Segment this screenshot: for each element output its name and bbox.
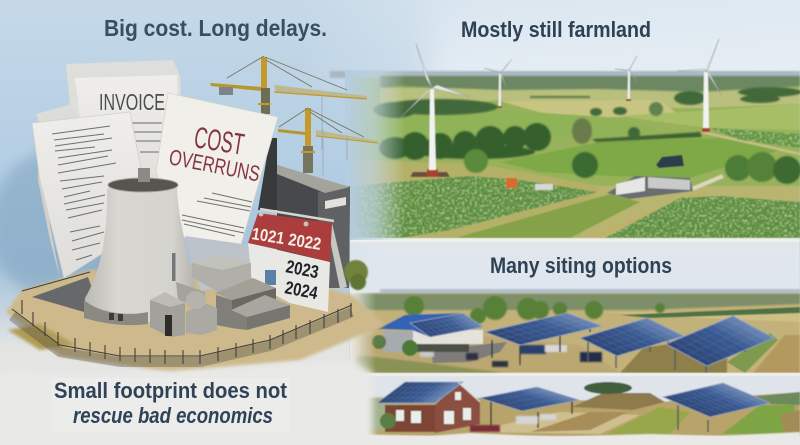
calendar (248, 209, 347, 312)
wind turbine 4 (677, 39, 722, 132)
tree beside plant (344, 260, 368, 290)
heading: siting: Many siting options (490, 253, 672, 278)
heading: farmland: Mostly still farmland (461, 17, 651, 42)
left panel fade over landscapes (345, 70, 405, 438)
dirt road (702, 132, 800, 154)
heading: bottom line one: Small footprint does not (54, 378, 288, 403)
panel: farmland landscape (330, 39, 800, 239)
bottom torn paper edge (350, 432, 800, 445)
solar carport (470, 387, 579, 432)
ground shadow and left haze (0, 150, 130, 300)
tree line: front hedge (379, 123, 551, 160)
calendar: 2024 (283, 277, 319, 303)
paper: cost overruns (156, 93, 278, 248)
paper: text document (32, 112, 150, 278)
nuclear plant site ground (6, 268, 385, 372)
solar canopy 2 (580, 318, 684, 368)
crane 2 (278, 108, 378, 175)
trees behind buildings (404, 296, 665, 324)
solar canopy lower (663, 383, 770, 432)
text: OVERRUNS: OVERRUNS (167, 144, 262, 186)
building: tank box (192, 255, 251, 292)
earth mound (572, 393, 665, 410)
text: COST: COST (192, 121, 246, 162)
building: brick house (377, 382, 480, 433)
building: dark turbine hall (258, 138, 350, 288)
farm machines (506, 178, 553, 190)
tree line: left clump (373, 87, 800, 118)
panel: solar siting strip (350, 238, 800, 373)
building: low block 1 (215, 278, 276, 328)
crop field right (605, 196, 800, 238)
vehicle: truck (656, 155, 684, 168)
plant buildings (150, 253, 290, 337)
text: INVOICE: INVOICE (99, 89, 165, 115)
text: calendar years: 1021 2022 (250, 224, 322, 254)
building: blue roof house (372, 313, 483, 356)
parked cars (420, 345, 602, 367)
bush and hedge (464, 118, 800, 184)
paper stack: invoice (36, 60, 182, 200)
crane 1 (210, 56, 367, 150)
plant cylinder (176, 282, 206, 309)
plant wall behind calendar (185, 236, 262, 290)
wind turbine 1 (399, 44, 470, 177)
calendar: 2023 (284, 256, 320, 282)
heading: bottom line two: rescue bad economics (73, 403, 273, 428)
building: small box (186, 303, 217, 335)
perimeter fence (12, 272, 352, 364)
heading: left top: Big cost. Long delays. (104, 15, 327, 41)
building: big box (150, 292, 185, 337)
solar canopy 3 (666, 316, 774, 373)
building: low block 2 (231, 295, 290, 330)
crop field left (350, 176, 597, 238)
battery storage compound (607, 176, 693, 199)
wind turbine 2 (484, 59, 512, 108)
cooling tower (84, 168, 195, 325)
ground (360, 335, 620, 373)
wind turbine 3 (615, 56, 638, 101)
bottom mist (0, 362, 372, 445)
panel: lower solar strip (350, 373, 800, 436)
solar carport 1 (485, 313, 602, 365)
